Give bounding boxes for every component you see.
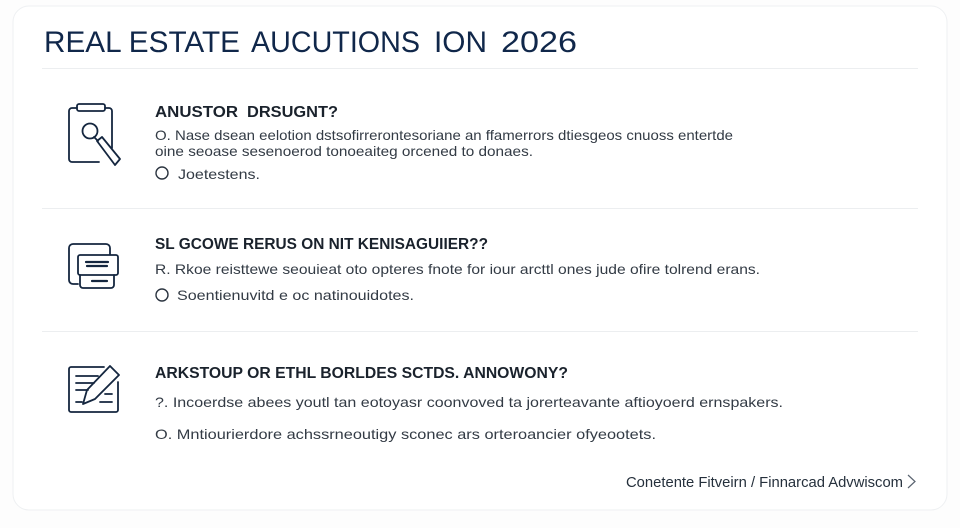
heading: ANUSTOR: [155, 104, 238, 121]
title: ION: [434, 26, 487, 59]
heading: DRSUGNT?: [247, 104, 338, 121]
icon: chevron: [908, 475, 915, 488]
text block: O. Mntiourierdore achssrneoutigy sconec ars orteroancier ofyeootets.: [155, 426, 656, 442]
icon: stacked cards: [69, 244, 118, 288]
text block: R. Rkoe reisttewe seouieat oto opteres fnote for iour arcttl ones jude ofire tolrend erans.: [155, 261, 760, 277]
icon: clipboard with magnifier: [69, 104, 120, 165]
heading: SL GCOWE RERUS ON NIT KENISAGUIIER??: [155, 236, 488, 253]
title: AUCUTIONS: [251, 26, 420, 59]
text block: [155, 394, 783, 442]
heading: [155, 104, 338, 121]
icon: form with pen: [69, 366, 119, 412]
title: REAL ESTATE: [44, 26, 240, 59]
title: 2026: [501, 26, 577, 59]
section 2: [69, 236, 760, 303]
text block: [155, 127, 733, 182]
text block: Soentienuvitd e oc natinouidotes.: [177, 287, 414, 303]
section 3: [69, 365, 783, 442]
text block: O. Nase dsean eelotion dstsofirrerontesoriane an ffamerrors dtiesgeos cnuoss entertde: [155, 127, 733, 143]
text block: oine seoase sesenoerod tonoeaiteg orcened to donaes.: [155, 143, 533, 159]
footer link: Conetente Fitveirn / Finnarcad Advwiscom: [626, 475, 903, 491]
heading: ARKSTOUP OR ETHL BORLDES SCTDS. ANNOWONY?: [155, 365, 568, 382]
section 1: [69, 104, 733, 182]
text block: Joetestens.: [178, 166, 260, 182]
text block: ?. Incoerdse abees youtl tan eotoyasr coonvoved ta jorerteavante aftioyoerd ernspakers.: [155, 394, 783, 410]
text block: [155, 261, 760, 303]
title: [44, 26, 577, 59]
